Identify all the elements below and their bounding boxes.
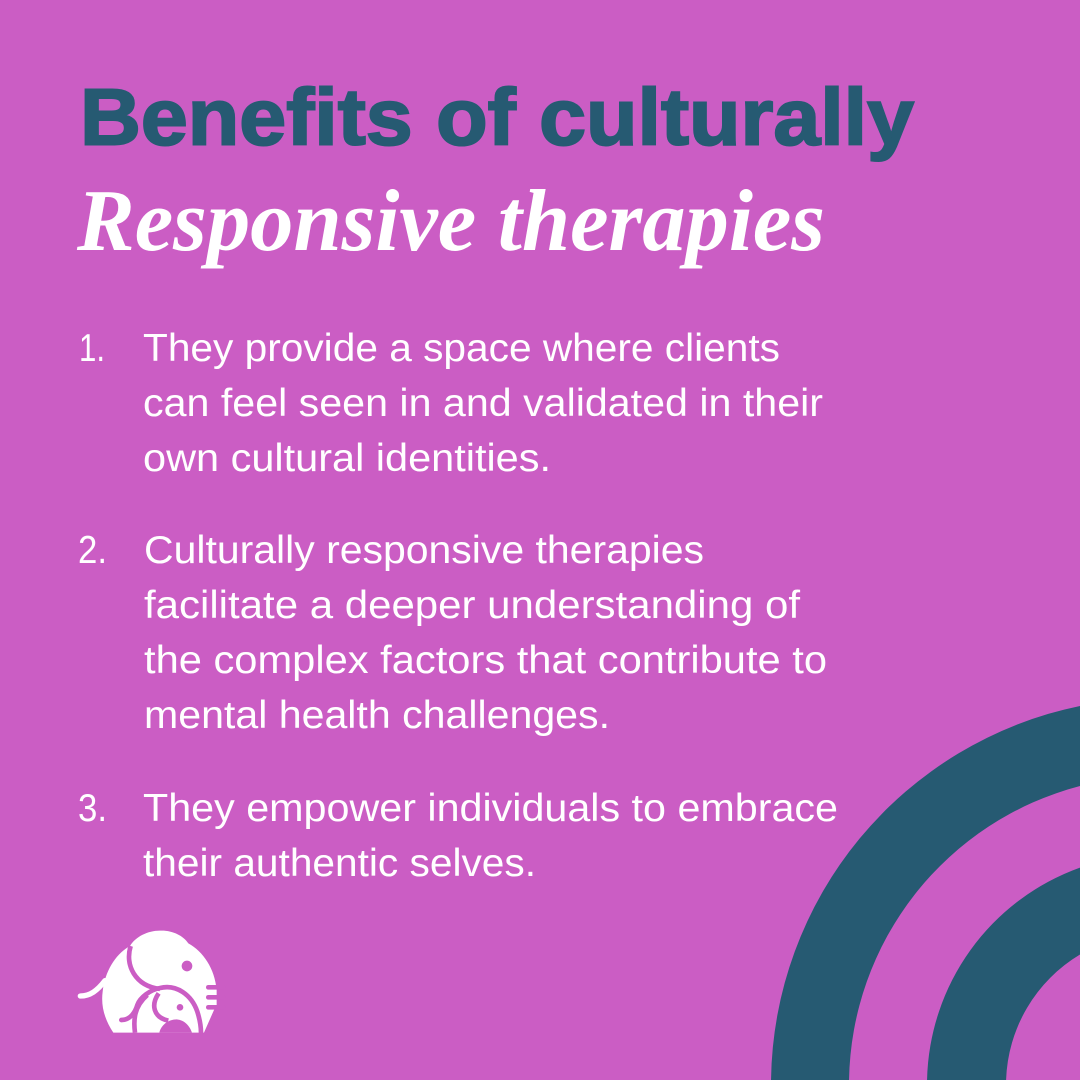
title bbox=[76, 72, 915, 270]
list item 2: the complex factors that contribute to bbox=[144, 639, 827, 682]
list item 1: own cultural identities. bbox=[143, 437, 551, 480]
list item 2: mental health challenges. bbox=[144, 694, 610, 737]
title line 2: Responsive therapies bbox=[76, 173, 825, 270]
icon: elephant and calf logo bbox=[80, 931, 223, 1033]
list item 1: They provide a space where clients bbox=[143, 327, 780, 370]
list item 2 bbox=[78, 529, 827, 737]
list item 3: 3. bbox=[78, 787, 107, 830]
numbered list bbox=[78, 327, 838, 885]
list item 2: Culturally responsive therapies bbox=[144, 529, 704, 572]
decorative concentric arcs bbox=[771, 706, 1080, 1080]
list item 1 bbox=[79, 327, 823, 480]
list item 3: They empower individuals to embrace bbox=[143, 787, 838, 830]
title line 1: Benefits of culturally bbox=[80, 72, 915, 162]
list item 3 bbox=[78, 787, 838, 885]
list item 1: 1. bbox=[79, 327, 105, 370]
list item 2: 2. bbox=[78, 529, 107, 572]
list item 1: can feel seen in and validated in their bbox=[143, 382, 823, 425]
list item 3: their authentic selves. bbox=[143, 842, 536, 885]
list item 2: facilitate a deeper understanding of bbox=[144, 584, 800, 627]
